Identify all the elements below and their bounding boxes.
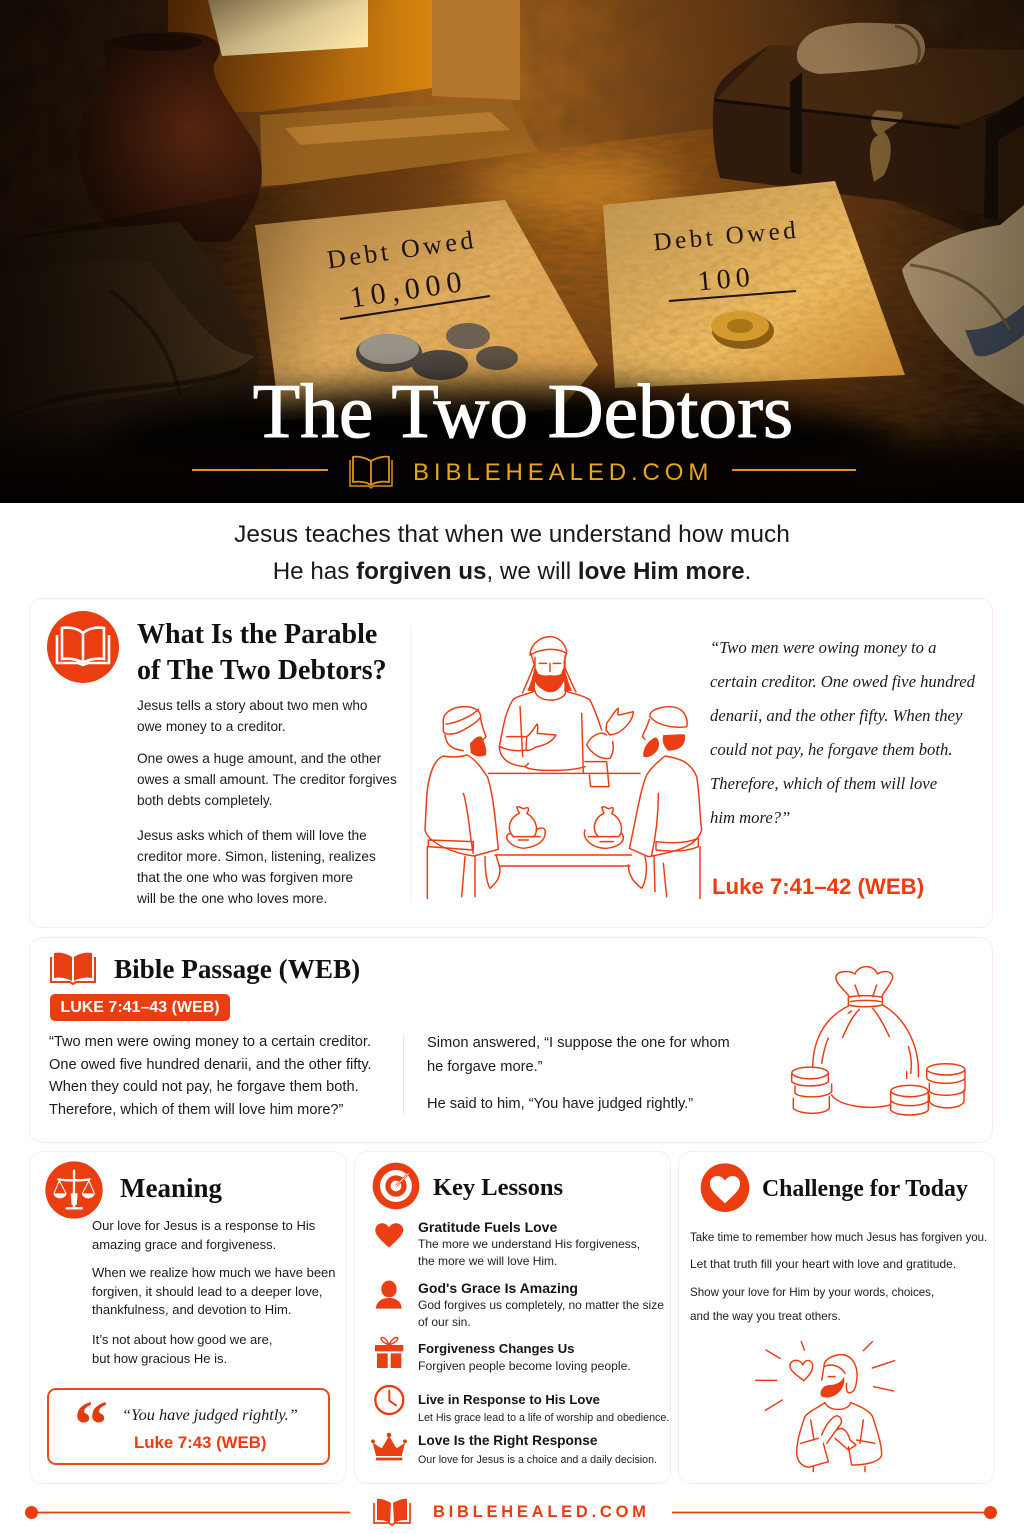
scripture quote: certain creditor. One owed five hundred	[710, 672, 975, 691]
parchment: debt 100	[600, 178, 910, 392]
icon: clock	[375, 1386, 403, 1414]
scripture quote: could not pay, he forgave them both.	[710, 740, 952, 759]
scripture quote: “Two men were owing money to a	[710, 638, 936, 657]
panel: challenge for today	[678, 1151, 995, 1484]
illustration: money bag with coins	[790, 966, 966, 1116]
window with sunlight	[168, 0, 548, 186]
scripture quote: Therefore, which of them will love	[710, 774, 937, 793]
story conclusion: that the one who was forgiven more	[137, 870, 353, 885]
meaning paragraph three	[92, 1332, 272, 1366]
title: The Two Debtors	[253, 368, 793, 454]
challenge line two: Let that truth fill your heart with love and gratitude.	[690, 1257, 956, 1271]
meaning paragraph two: thankfulness, and devotion to Him.	[92, 1302, 291, 1317]
meaning paragraph two	[92, 1265, 336, 1317]
icon: heart	[375, 1223, 403, 1248]
passage reply: He said to him, “You have judged rightly.”	[427, 1096, 693, 1112]
story text	[137, 698, 368, 734]
parchment: debt 100: 100	[697, 262, 756, 297]
panel: meaning	[29, 1151, 347, 1484]
lesson five: Love Is the Right Response	[418, 1433, 598, 1448]
icon: scales of justice	[45, 1161, 103, 1219]
passage right column: he forgave more.”	[427, 1059, 543, 1075]
intro statement: He has forgiven us, we will love Him more.	[273, 558, 751, 585]
heading: What Is the Parable	[137, 619, 377, 650]
footer brand bar	[25, 1498, 997, 1526]
icon: quotation mark: “	[74, 1386, 108, 1462]
story text continued	[137, 751, 397, 808]
story conclusion	[137, 828, 376, 906]
gold brand line	[192, 457, 856, 488]
cloth pouch	[797, 23, 925, 74]
passage left column: One owed five hundred denarii, and the other fifty.	[49, 1057, 372, 1073]
story text continued: One owes a huge amount, and the other	[137, 751, 381, 766]
footer brand text: BIBLEHEALED.COM	[433, 1503, 650, 1521]
right debtor	[628, 707, 702, 898]
icon: gift	[375, 1338, 403, 1368]
challenge line three: Show your love for Him by your words, choices,	[690, 1286, 934, 1299]
heading: of The Two Debtors?	[137, 655, 387, 686]
lesson three: Forgiven people become loving people.	[418, 1359, 631, 1373]
lesson two: God forgives us completely, no matter the size	[418, 1298, 664, 1312]
key lessons icons	[370, 1162, 420, 1460]
lesson two: of our sin.	[418, 1315, 471, 1329]
story conclusion: will be the one who loves more.	[137, 891, 327, 906]
story text: owe money to a creditor.	[137, 719, 286, 734]
blue-striped cloth	[902, 205, 1024, 405]
wooden table	[40, 128, 1024, 448]
scripture quote: him more?”	[710, 808, 790, 827]
lesson two: God's Grace Is Amazing	[418, 1280, 578, 1296]
vignette	[0, 0, 1024, 503]
lesson five: Our love for Jesus is a choice and a daily decision.	[418, 1454, 657, 1466]
story text: Jesus tells a story about two men who	[137, 698, 368, 713]
lesson four	[418, 1392, 669, 1424]
lesson three	[418, 1341, 631, 1373]
parchment: debt 10,000: 10,000	[348, 265, 470, 315]
lesson five	[418, 1433, 657, 1466]
lesson four: Let His grace lead to a life of worship and obedience.	[418, 1412, 669, 1424]
passage right column	[427, 1035, 730, 1075]
scripture reference: Luke 7:41–42 (WEB)	[712, 874, 924, 899]
panel: what is the parable	[29, 598, 993, 928]
parchment: debt 100: Debt Owed	[652, 217, 800, 256]
passage left column: Therefore, which of them will love him more?”	[49, 1102, 343, 1118]
gold brand line: BIBLEHEALED.COM	[413, 459, 713, 486]
icon: crown	[371, 1433, 407, 1460]
man figure	[797, 1355, 882, 1472]
heading: Bible Passage (WEB)	[114, 954, 360, 984]
scripture quote: denarii, and the other fifty. When they	[710, 706, 962, 725]
clay vase	[78, 32, 262, 242]
wall background	[0, 0, 1024, 503]
heading: Key Lessons	[433, 1174, 563, 1201]
passage right column: Simon answered, “I suppose the one for whom	[427, 1035, 730, 1051]
passage left column: When they could not pay, he forgave them both.	[49, 1079, 359, 1095]
table and money bags	[488, 773, 640, 866]
wooden chest	[713, 45, 1024, 225]
gold coin	[711, 311, 774, 349]
heading	[137, 619, 387, 686]
icon: person	[376, 1281, 402, 1309]
challenge line one: Take time to remember how much Jesus has forgiven you.	[690, 1232, 987, 1244]
lesson four: Live in Response to His Love	[418, 1392, 600, 1407]
dark title gradient	[0, 180, 1024, 510]
quote reference: Luke 7:43 (WEB)	[134, 1433, 266, 1452]
icon: target	[373, 1163, 419, 1209]
intro statement: Jesus teaches that when we understand how much	[234, 521, 790, 548]
passage left column	[49, 1034, 372, 1118]
quote text: “You have judged rightly.”	[122, 1405, 298, 1424]
passage left column: “Two men were owing money to a certain creditor.	[49, 1034, 371, 1050]
meaning paragraph three: It’s not about how good we are,	[92, 1332, 272, 1347]
story conclusion: Jesus asks which of them will love the	[137, 828, 367, 843]
lesson one	[418, 1219, 640, 1268]
meaning paragraph one: Our love for Jesus is a response to His	[92, 1218, 315, 1233]
lesson two	[418, 1280, 664, 1329]
left debtor	[425, 707, 500, 898]
story text continued: owes a small amount. The creditor forgives	[137, 772, 397, 787]
lesson three: Forgiveness Changes Us	[418, 1341, 574, 1356]
coins on first parchment	[356, 323, 518, 380]
icon: open book in circle	[47, 611, 119, 683]
Jesus figure	[499, 637, 633, 787]
meaning paragraph three: but how gracious He is.	[92, 1351, 227, 1366]
panel: key lessons	[354, 1151, 671, 1484]
lesson one: Gratitude Fuels Love	[418, 1219, 557, 1235]
reference badge	[50, 994, 230, 1021]
light rays and heart	[756, 1342, 895, 1410]
intro statement	[234, 521, 790, 585]
burlap cloth	[0, 222, 259, 470]
parchment: debt 10,000: Debt Owed	[325, 225, 478, 274]
lesson one: the more we will love Him.	[418, 1254, 557, 1268]
scripture quote	[710, 638, 975, 827]
heading: Challenge for Today	[762, 1176, 968, 1202]
illustration: Jesus and two debtors at a table	[410, 625, 702, 904]
meaning paragraph two: When we realize how much we have been	[92, 1265, 336, 1280]
panel: bible passage	[29, 937, 993, 1143]
callout: quote box	[47, 1388, 330, 1465]
challenge line four: and the way you treat others.	[690, 1310, 841, 1323]
meaning paragraph two: forgiven, it should lead to a deeper love,	[92, 1284, 323, 1299]
lesson one: The more we understand His forgiveness,	[418, 1237, 640, 1251]
reference badge: LUKE 7:41–43 (WEB)	[60, 999, 220, 1016]
meaning paragraph one	[92, 1218, 315, 1252]
parchment: debt 10,000	[250, 195, 605, 425]
icon: heart in circle	[701, 1163, 749, 1212]
meaning paragraph one: amazing grace and forgiveness.	[92, 1237, 276, 1252]
footer lines and book icon	[25, 1498, 997, 1526]
icon: solid book	[50, 952, 96, 986]
illustration: man with hands on heart	[700, 1163, 896, 1472]
story text continued: both debts completely.	[137, 793, 272, 808]
story conclusion: creditor more. Simon, listening, realizes	[137, 849, 376, 864]
heading: Meaning	[120, 1173, 222, 1203]
hero image: rustic table with two debt parchments	[0, 0, 1024, 503]
